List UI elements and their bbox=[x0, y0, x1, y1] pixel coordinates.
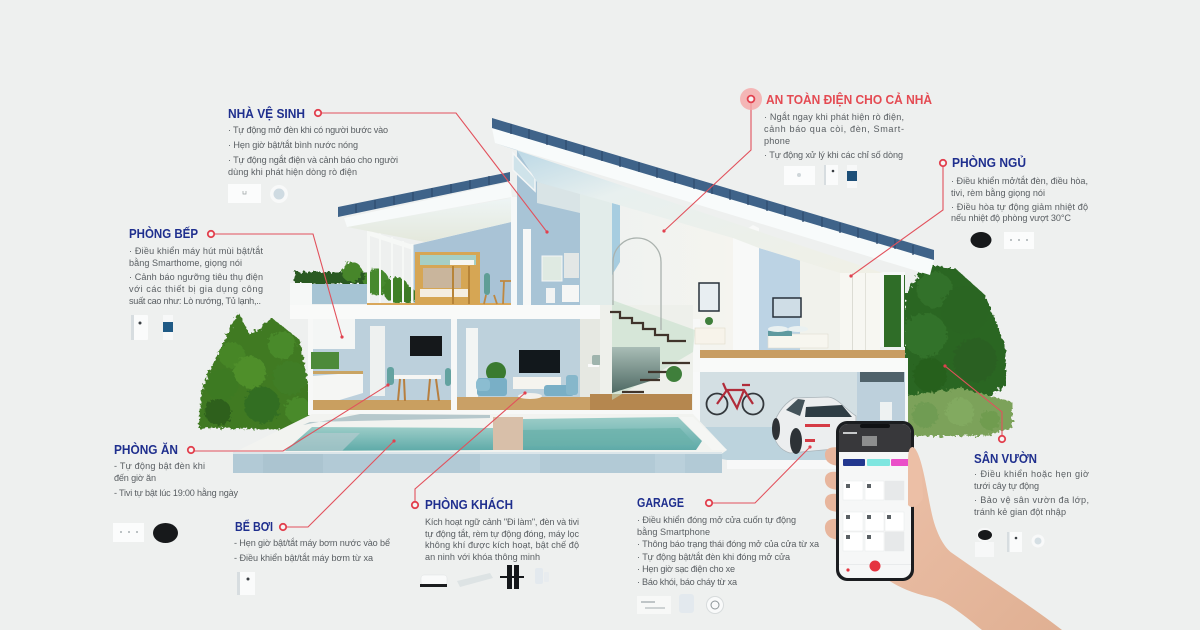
heading: garage: GARAGE bbox=[637, 496, 684, 510]
callout line: garage bbox=[712, 445, 812, 503]
text: phòng bếp: suất cao như: Lò nướng, Tủ lạnh,.. bbox=[129, 296, 261, 306]
wall frames bbox=[699, 283, 719, 311]
icons: nhà vệ sinh devices bbox=[228, 184, 288, 203]
text: phòng khách bbox=[425, 517, 579, 562]
panel: sân vườn bbox=[974, 436, 1089, 557]
balcony glass bbox=[367, 230, 414, 304]
pool bbox=[233, 414, 727, 473]
text: phòng khách: không khí được kích hoạt, bật chế độ bbox=[425, 540, 579, 550]
callout line: bể bơi bbox=[286, 439, 396, 527]
phone device cards bbox=[843, 481, 904, 551]
text: bể bơi bbox=[234, 538, 390, 563]
icons: an toàn điện devices bbox=[784, 165, 857, 188]
text: phòng ngủ: nếu nhiệt độ phòng vượt 30°C bbox=[951, 213, 1071, 223]
heading: phòng ngủ: PHÒNG NGỦ bbox=[952, 155, 1026, 170]
right roof bbox=[492, 118, 934, 275]
panel: phòng bếp bbox=[129, 226, 263, 340]
heading: phòng khách: PHÒNG KHÁCH bbox=[425, 497, 513, 512]
text: an toàn điện: phone bbox=[764, 136, 790, 146]
wrist and palm bbox=[885, 447, 1062, 630]
upper bathroom wall bbox=[517, 150, 580, 305]
text: nhà vệ sinh bbox=[228, 125, 398, 177]
text: nhà vệ sinh: · Tự động ngắt điện và cảnh báo cho người bbox=[228, 155, 398, 165]
upper slab bbox=[290, 305, 615, 319]
text: nhà vệ sinh: · Hẹn giờ bật/tắt bình nước nóng bbox=[228, 140, 358, 150]
text: phòng ăn: đến giờ ăn bbox=[114, 473, 156, 483]
bicycle bbox=[706, 383, 764, 414]
text: sân vườn: tưới cây tự động bbox=[974, 481, 1039, 491]
text: garage bbox=[637, 515, 820, 587]
callout line: nhà vệ sinh bbox=[321, 113, 549, 234]
heading: an toàn điện bbox=[740, 88, 932, 110]
text: garage: bằng Smartphone bbox=[637, 527, 710, 537]
heading: an toàn điện: AN TOÀN ĐIỆN CHO CẢ NHÀ bbox=[766, 92, 932, 107]
icons: phòng ăn devices bbox=[113, 523, 178, 543]
icons: phòng ngủ devices bbox=[970, 232, 1034, 249]
panel: nhà vệ sinh bbox=[228, 106, 398, 203]
bunk bed bbox=[415, 252, 480, 304]
text: garage: · Điều khiển đóng mở cửa cuốn tự động bbox=[637, 515, 796, 525]
left roof bbox=[338, 172, 512, 242]
text: sân vườn: · Điều khiển hoặc hẹn giờ bbox=[974, 469, 1089, 479]
icons: phòng bếp devices bbox=[131, 315, 173, 340]
text: garage: · Báo khói, báo cháy từ xa bbox=[637, 577, 738, 587]
text: phòng khách: tự động tắt, rèm tự động đóng, máy lọc bbox=[425, 529, 579, 539]
text: phòng khách: an ninh với khóa thông minh bbox=[425, 552, 540, 562]
stair plant bbox=[666, 366, 682, 382]
panel: phòng ngủ bbox=[940, 155, 1088, 249]
text: phòng ăn: - Tự động bật đèn khi bbox=[114, 461, 205, 471]
icons: sân vườn devices bbox=[975, 528, 1044, 557]
arch bbox=[613, 238, 661, 330]
text: nhà vệ sinh: dùng khi phát hiện dòng rò điện bbox=[228, 167, 357, 177]
bathroom fittings bbox=[542, 256, 562, 281]
text: phòng ngủ: · Điều hòa tự động giảm nhiệt độ bbox=[951, 202, 1088, 212]
text: garage: · Thông báo trạng thái đóng mở của cửa từ xa bbox=[637, 539, 820, 549]
upper left room wall bbox=[413, 222, 511, 305]
text: sân vườn bbox=[974, 469, 1089, 517]
phone card glyphs bbox=[846, 484, 891, 539]
text: sân vườn: tránh kẻ gian đột nhập bbox=[974, 507, 1066, 517]
house bbox=[290, 150, 908, 470]
stair treads bbox=[610, 312, 690, 392]
panel: phòng khách bbox=[412, 497, 579, 589]
phone scene buttons bbox=[843, 459, 865, 466]
dining room bbox=[313, 319, 451, 410]
text: phòng ngủ: · Điều khiển mở/tắt đèn, điều hòa, bbox=[951, 176, 1088, 186]
text: garage: · Hẹn giờ sạc điện cho xe bbox=[637, 564, 735, 574]
heading: nhà vệ sinh: NHÀ VỆ SINH bbox=[228, 106, 305, 121]
text: garage: · Tự động bật/tắt đèn khi đóng mở cửa bbox=[637, 552, 791, 562]
text: phòng bếp: · Cảnh báo ngưỡng tiêu thụ điện bbox=[129, 272, 263, 282]
text: nhà vệ sinh: · Tự động mở đèn khi có người bước vào bbox=[228, 125, 388, 135]
text: phòng bếp: với các thiết bị gia dụng công bbox=[129, 284, 263, 294]
callout line: phòng ăn bbox=[194, 383, 390, 451]
left pillar and door bbox=[511, 197, 517, 309]
text: phòng ngủ: tivi, rèm bằng giọng nói bbox=[951, 188, 1045, 198]
text: sân vườn: · Bảo vệ sân vườn đa lớp, bbox=[974, 495, 1089, 505]
text: phòng bếp: bằng Smarthome, giọng nói bbox=[129, 258, 242, 268]
balcony greenery bbox=[294, 262, 416, 303]
text: an toàn điện: cảnh báo qua còi, đèn, Smart- bbox=[764, 124, 904, 134]
phone body bbox=[836, 421, 914, 581]
bed bbox=[768, 334, 828, 348]
panel: phòng ăn bbox=[113, 442, 238, 543]
text: an toàn điện bbox=[764, 112, 904, 160]
thumb bbox=[908, 447, 923, 507]
right window with greenery bbox=[880, 273, 905, 358]
upper right floors bbox=[733, 350, 905, 358]
panel: bể bơi bbox=[234, 519, 390, 595]
balcony planter bbox=[290, 283, 312, 305]
text: phòng khách: Kích hoạt ngữ cảnh "Đi làm", đèn và tivi bbox=[425, 517, 579, 527]
text: phòng bếp: · Điều khiển máy hút mùi bật/tắt bbox=[129, 246, 263, 256]
phone header bbox=[839, 424, 911, 452]
text: phòng ăn: - Tivi tự bật lúc 19:00 hằng ngày bbox=[114, 488, 238, 498]
closet bbox=[840, 273, 880, 350]
callout line: phòng ngủ bbox=[849, 167, 943, 278]
fingers bbox=[825, 447, 842, 540]
upper wall panels bbox=[580, 193, 612, 305]
heading: phòng bếp: PHÒNG BẾP bbox=[129, 226, 198, 241]
hand holding phone bbox=[825, 421, 1062, 630]
text: bể bơi: - Hẹn giờ bật/tắt máy bơm nước vào bể bbox=[234, 538, 390, 548]
heading: phòng ăn: PHÒNG ĂN bbox=[114, 442, 178, 457]
text: phòng bếp bbox=[129, 246, 263, 306]
callout line: phòng khách bbox=[415, 391, 527, 502]
ground floor shell bbox=[308, 319, 700, 415]
text: bể bơi: - Điều khiển bật/tắt máy bơm từ xa bbox=[234, 553, 374, 563]
text: phòng ăn bbox=[114, 461, 238, 498]
icons: phòng khách devices bbox=[420, 565, 549, 589]
phone app bar bbox=[839, 564, 911, 565]
callout line: an toàn điện bbox=[662, 103, 751, 233]
panel: garage bbox=[637, 496, 820, 614]
living room bbox=[457, 319, 600, 410]
central pillar bbox=[733, 225, 759, 358]
clerestory window bbox=[513, 153, 535, 191]
car bbox=[772, 397, 856, 454]
callout line: phòng bếp bbox=[214, 234, 344, 339]
heading: sân vườn: SÂN VƯỜN bbox=[974, 451, 1037, 466]
desk chair bbox=[484, 273, 490, 295]
icons: garage devices bbox=[637, 594, 724, 614]
bedroom wall bbox=[759, 248, 840, 350]
staircase area bbox=[600, 305, 693, 410]
illustration: left garden tree bbox=[198, 312, 316, 430]
illustration: right garden tree bbox=[903, 265, 1012, 436]
panel: an toàn điện cho cả nhà bbox=[740, 88, 932, 188]
text: phòng ngủ bbox=[951, 176, 1088, 223]
upper floor timber strip bbox=[367, 303, 607, 306]
garage bbox=[700, 372, 857, 427]
icon: bể bơi socket bbox=[237, 572, 255, 595]
callout line: sân vườn bbox=[943, 364, 1002, 436]
heading: bể bơi: BỂ BƠI bbox=[235, 519, 273, 534]
text: an toàn điện: · Ngắt ngay khi phát hiện rò điện, bbox=[764, 112, 904, 122]
text: an toàn điện: · Tự động xử lý khi các chỉ số dòng bbox=[764, 150, 903, 160]
